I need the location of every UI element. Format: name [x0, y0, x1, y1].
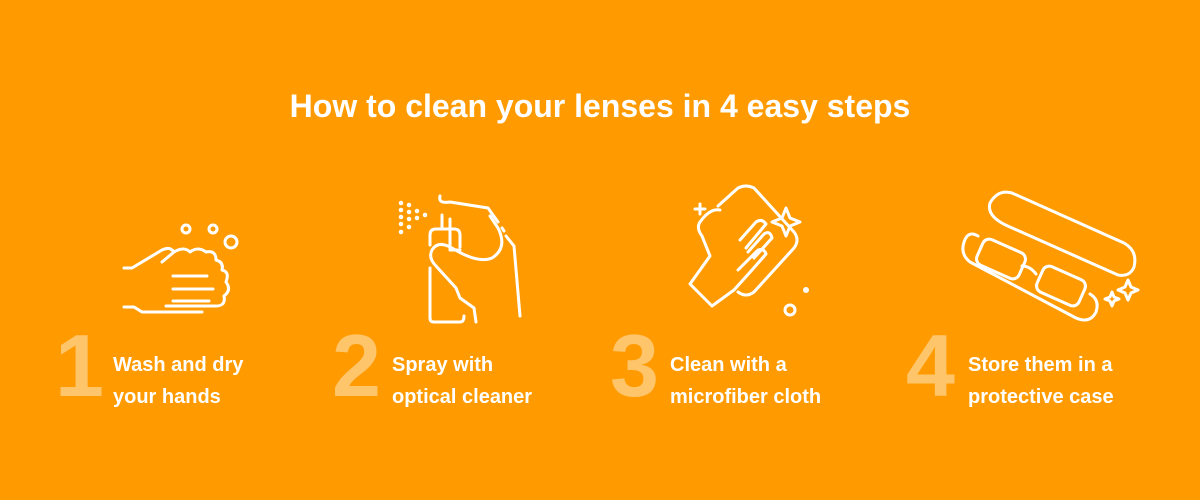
step 4 number: 4 — [906, 316, 955, 415]
step 4 text: Store them in a — [968, 354, 1112, 376]
step 2 text — [392, 354, 532, 408]
step 3 number: 3 — [610, 316, 659, 415]
step 1 text — [113, 354, 244, 408]
title: How to clean your lenses in 4 easy steps — [290, 88, 910, 124]
icon: washing hands — [124, 225, 237, 312]
step 1 number: 1 — [55, 316, 104, 415]
step 3 text — [670, 354, 821, 408]
icon: cloth wiping — [690, 186, 808, 315]
step 3 text: Clean with a — [670, 354, 787, 376]
step 2 text: Spray with — [392, 354, 493, 376]
icon: spray bottle — [400, 196, 520, 322]
step 2 text: optical cleaner — [392, 386, 532, 408]
step 4 text: protective case — [968, 386, 1114, 408]
step 1 text: your hands — [113, 386, 221, 408]
step 2 number: 2 — [332, 316, 381, 415]
step 1 text: Wash and dry — [113, 354, 243, 376]
icon: glasses case — [963, 192, 1138, 320]
step 4 text — [968, 354, 1114, 408]
step 3 text: microfiber cloth — [670, 386, 821, 408]
